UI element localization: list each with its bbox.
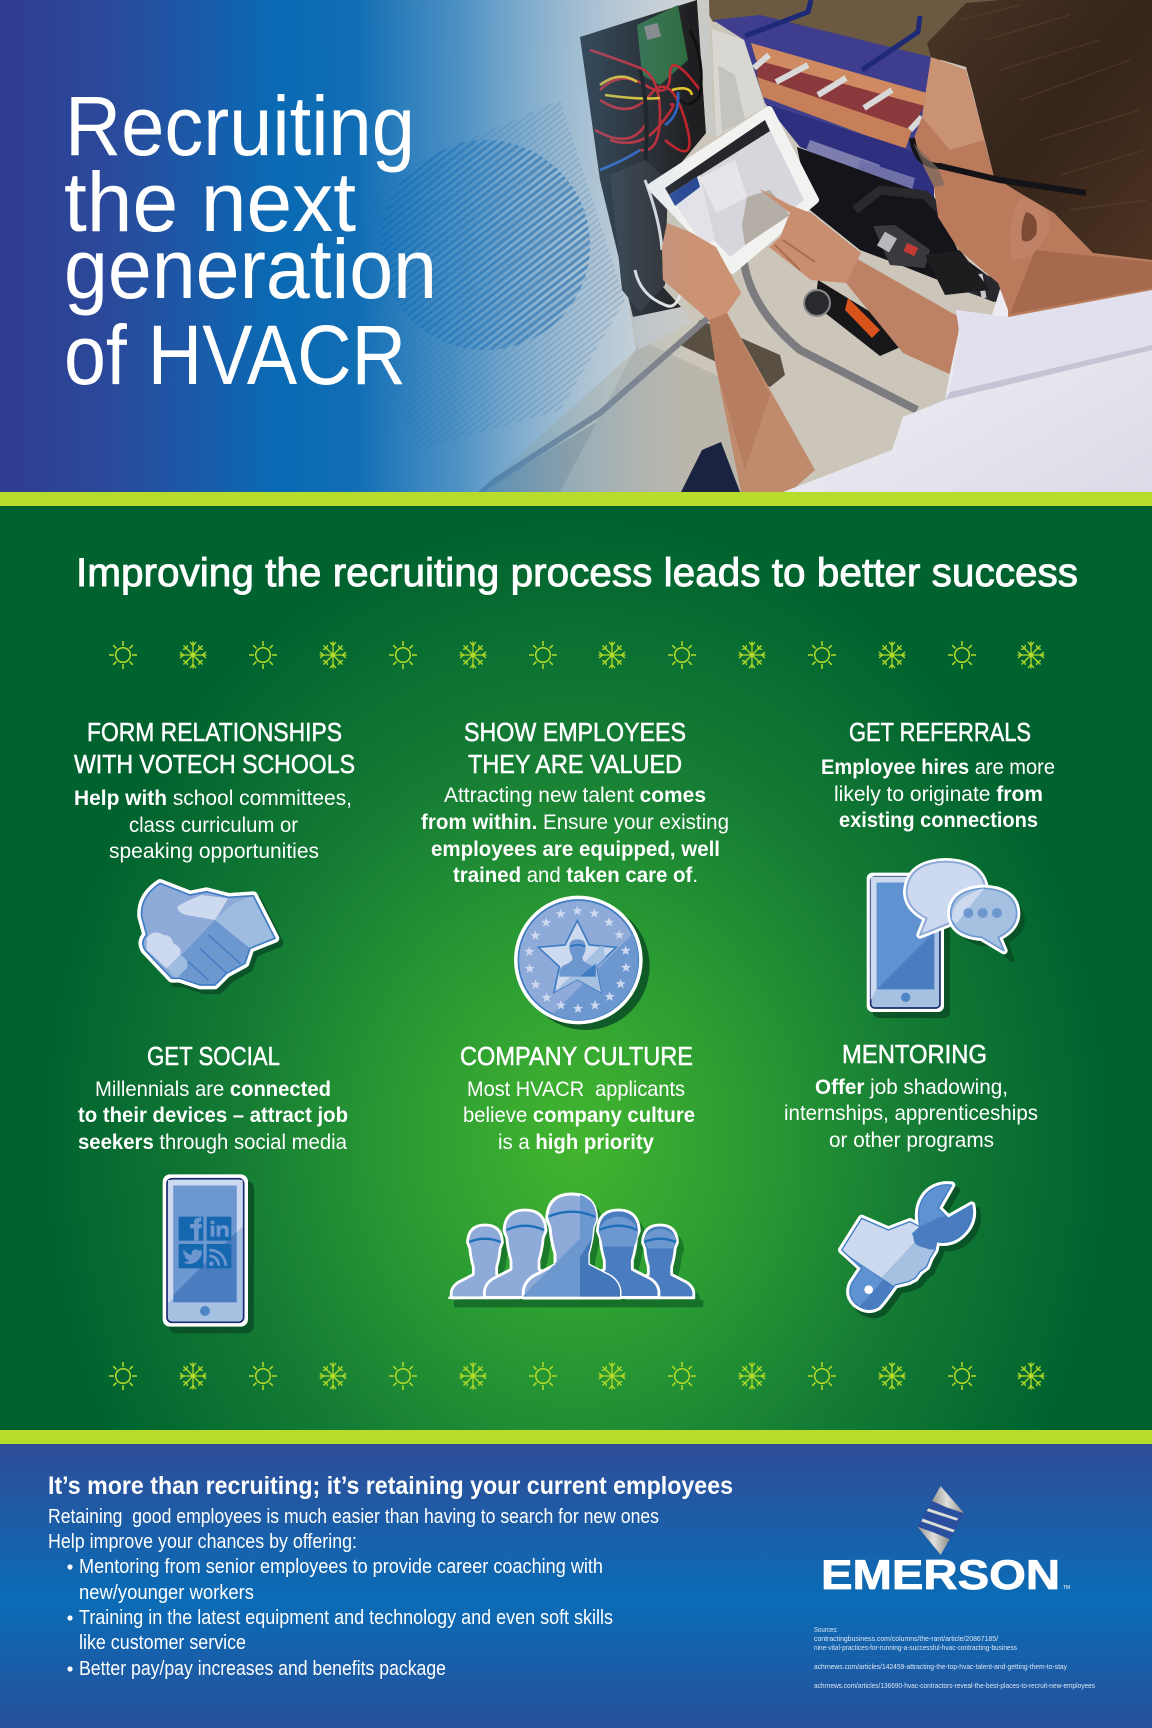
title: generation xyxy=(64,222,437,316)
Emerson logo: TM xyxy=(1063,1585,1070,1591)
sources: nine-vital-practices-for-running-a-successful-hvac-contracting-business xyxy=(814,1643,1017,1652)
block: company culture: Most HVACR applicants xyxy=(467,1078,685,1101)
footer text and bullets: Better pay/pay increases and benefits package xyxy=(79,1658,446,1680)
block: get social: Millennials are connected xyxy=(95,1078,331,1101)
block: show employees: employees are equipped, well xyxy=(431,838,720,861)
section heading: Improving the recruiting process leads to better success xyxy=(76,551,1078,595)
footer text and bullets: like customer service xyxy=(79,1632,246,1654)
block: company culture: COMPANY CULTURE xyxy=(460,1041,693,1071)
Emerson logo: EMERSON xyxy=(821,1551,1060,1598)
block: mentoring: Offer job shadowing, xyxy=(815,1076,1008,1099)
block: form relationships xyxy=(74,717,355,863)
block: show employees: Attracting new talent comes xyxy=(444,784,706,807)
sources xyxy=(814,1625,1095,1690)
sources: Sources: xyxy=(814,1625,838,1634)
panel: recruiting tips xyxy=(74,556,1077,1430)
icon: hand holding wrench xyxy=(840,1185,980,1317)
footer text and bullets: Help improve your chances by offering: xyxy=(48,1531,357,1553)
photo: technician using tablet at an HVAC unit xyxy=(300,0,1152,492)
block: company culture: is a high priority xyxy=(498,1131,654,1154)
icon: group of workers xyxy=(448,1193,703,1307)
block: get referrals: Employee hires are more xyxy=(821,756,1055,779)
block: get social: GET SOCIAL xyxy=(147,1041,280,1071)
tablet xyxy=(651,110,815,270)
block: get referrals: existing connections xyxy=(839,809,1038,832)
block: form relationships: FORM RELATIONSHIPS xyxy=(87,717,342,747)
block: company culture xyxy=(460,1041,695,1154)
block: show employees: trained and taken care of. xyxy=(453,864,698,887)
title: the next xyxy=(64,155,356,249)
footer text and bullets: Retaining good employees is much easier than having to search for new ones xyxy=(48,1506,659,1528)
title xyxy=(65,94,432,385)
lime divider band xyxy=(0,492,1152,506)
panel: retaining employees footer xyxy=(0,1444,1152,1728)
icon: handshake xyxy=(142,883,279,990)
hands xyxy=(662,188,861,320)
icon: phone with social media tiles xyxy=(163,1174,254,1333)
footer heading: It’s more than recruiting; it’s retaining your current employees xyxy=(48,1472,733,1500)
block: form relationships: speaking opportunities xyxy=(109,840,319,863)
block: mentoring: or other programs xyxy=(829,1129,994,1152)
panel: hero photo with title xyxy=(0,0,1152,492)
icon row: suns and snowflakes bottom xyxy=(109,1362,1044,1390)
head xyxy=(912,0,1152,317)
block: company culture: believe company culture xyxy=(463,1104,695,1127)
person xyxy=(662,223,959,492)
icon row: suns and snowflakes top xyxy=(109,641,1044,669)
footer text and bullets: new/younger workers xyxy=(79,1582,254,1604)
block: show employees: from within. Ensure your existing xyxy=(421,811,729,834)
AC unit xyxy=(380,0,765,492)
Emerson logo xyxy=(821,1486,1070,1598)
title: of HVACR xyxy=(64,308,406,402)
block: get social: to their devices – attract job xyxy=(78,1104,348,1127)
block: form relationships: Help with school committees, xyxy=(74,787,352,810)
block: get social: seekers through social media xyxy=(78,1131,347,1154)
block: show employees xyxy=(421,717,729,887)
block: show employees: SHOW EMPLOYEES xyxy=(464,717,686,747)
block: mentoring: MENTORING xyxy=(842,1039,987,1069)
block: form relationships: class curriculum or xyxy=(129,814,298,837)
block: mentoring xyxy=(784,1039,1038,1152)
icon: phone with speech bubbles xyxy=(867,862,1025,1018)
block: get referrals: likely to originate from xyxy=(834,783,1043,806)
sources: contractingbusiness.com/columns/the-rant/article/20867185/ xyxy=(814,1634,999,1643)
block: get social xyxy=(78,1041,348,1154)
footer text and bullets xyxy=(48,1506,659,1680)
block: form relationships: WITH VOTECH SCHOOLS xyxy=(74,749,355,779)
lime divider band xyxy=(0,1430,1152,1444)
blue gradient overlay xyxy=(0,0,677,492)
title: Recruiting xyxy=(65,79,415,173)
footer text and bullets: Mentoring from senior employees to provide career coaching with xyxy=(79,1556,603,1578)
icon: medal with star xyxy=(514,896,650,1030)
block: show employees: THEY ARE VALUED xyxy=(468,749,682,779)
sources: achrnews.com/articles/136690-hvac-contractors-reveal-the-best-places-to-recruit-new-employees xyxy=(814,1681,1095,1690)
block: get referrals: GET REFERRALS xyxy=(849,717,1031,747)
sources: achrnews.com/articles/142459-attracting-the-top-hvac-talent-and-getting-them-to-stay xyxy=(814,1662,1067,1671)
block: mentoring: internships, apprenticeships xyxy=(784,1102,1038,1125)
shirt xyxy=(783,290,1152,492)
block: get referrals xyxy=(821,717,1055,832)
footer text and bullets: Training in the latest equipment and technology and even soft skills xyxy=(79,1607,613,1629)
